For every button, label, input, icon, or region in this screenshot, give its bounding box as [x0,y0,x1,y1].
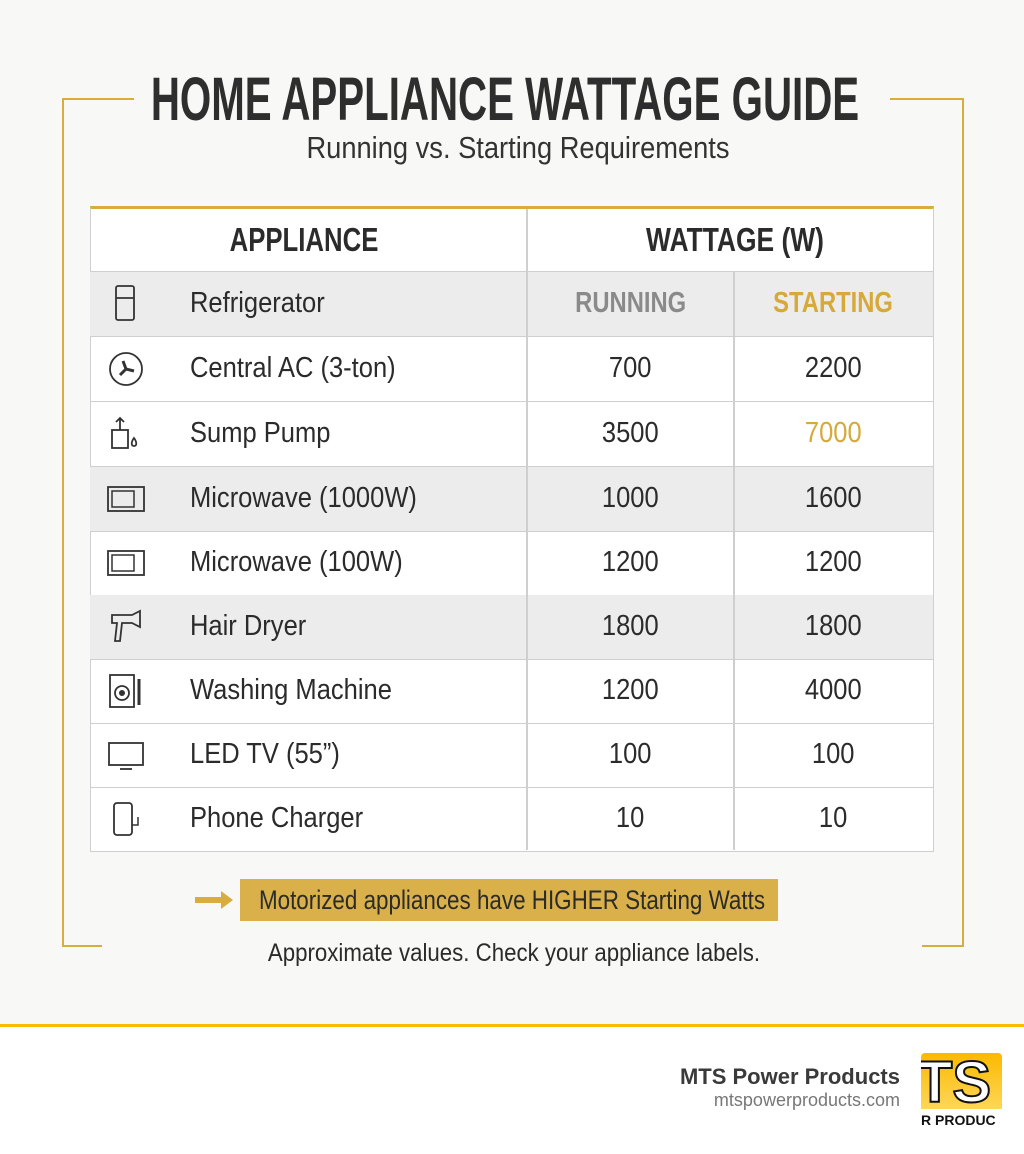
row: central ac [90,337,933,402]
row: microwave 100: 1200 [805,546,862,578]
logo: R PRODUC [921,1112,996,1128]
row: washing machine: 4000 [805,674,862,706]
callout [240,879,778,921]
row: hair dryer: Hair Dryer [190,610,306,642]
row: refrigerator: STARTING [774,287,893,319]
row: refrigerator [90,272,933,337]
table header [90,209,933,273]
row: hair dryer: 1800 [602,610,659,642]
row: microwave 1000: 1600 [805,482,862,514]
footer text: MTS Power Products [680,1064,900,1089]
table [90,206,934,852]
row: washing machine: Washing Machine [190,674,392,706]
row: washing machine [90,659,933,724]
row: microwave 1000: Microwave (1000W) [190,482,417,514]
row: led tv [90,723,933,788]
row: sump pump: 7000 [805,417,862,449]
logo [921,1053,1002,1131]
row: microwave 100: 1200 [602,546,659,578]
footer text [680,1064,900,1110]
table header: WATTAGE (W) [646,221,824,258]
row: central ac: 700 [609,352,652,384]
row: microwave 100 [90,531,933,596]
row: led tv: 100 [812,738,855,770]
row: central ac: Central AC (3-ton) [190,352,396,384]
row: phone charger [113,802,848,836]
footer text: mtspowerproducts.com [714,1090,900,1110]
row: phone charger: 10 [819,802,848,834]
row: phone charger: 10 [616,802,645,834]
arrow [195,891,233,909]
footer line [0,1024,1024,1027]
callout: Motorized appliances have HIGHER Starting Watts [259,885,765,915]
row: washing machine: 1200 [602,674,659,706]
row: hair dryer: 1800 [805,610,862,642]
row: microwave 1000: 1000 [602,482,659,514]
table header: APPLIANCE [230,221,378,258]
row: sump pump [90,402,933,467]
row: microwave 1000 [90,467,933,532]
title: HOME APPLIANCE WATTAGE GUIDE [151,65,859,133]
row: refrigerator: Refrigerator [190,287,325,319]
row: central ac: 2200 [805,352,862,384]
row: led tv: 100 [609,738,652,770]
row: refrigerator: RUNNING [575,287,686,319]
row: sump pump: 3500 [602,417,659,449]
row: phone charger: Phone Charger [190,802,363,834]
row: sump pump: Sump Pump [190,417,330,449]
subtitle: Running vs. Starting Requirements [306,130,730,165]
row: microwave 100: Microwave (100W) [190,546,403,578]
row: led tv: LED TV (55”) [190,738,340,770]
row: hair dryer [90,595,933,660]
footnote: Approximate values. Check your appliance labels. [268,939,760,967]
